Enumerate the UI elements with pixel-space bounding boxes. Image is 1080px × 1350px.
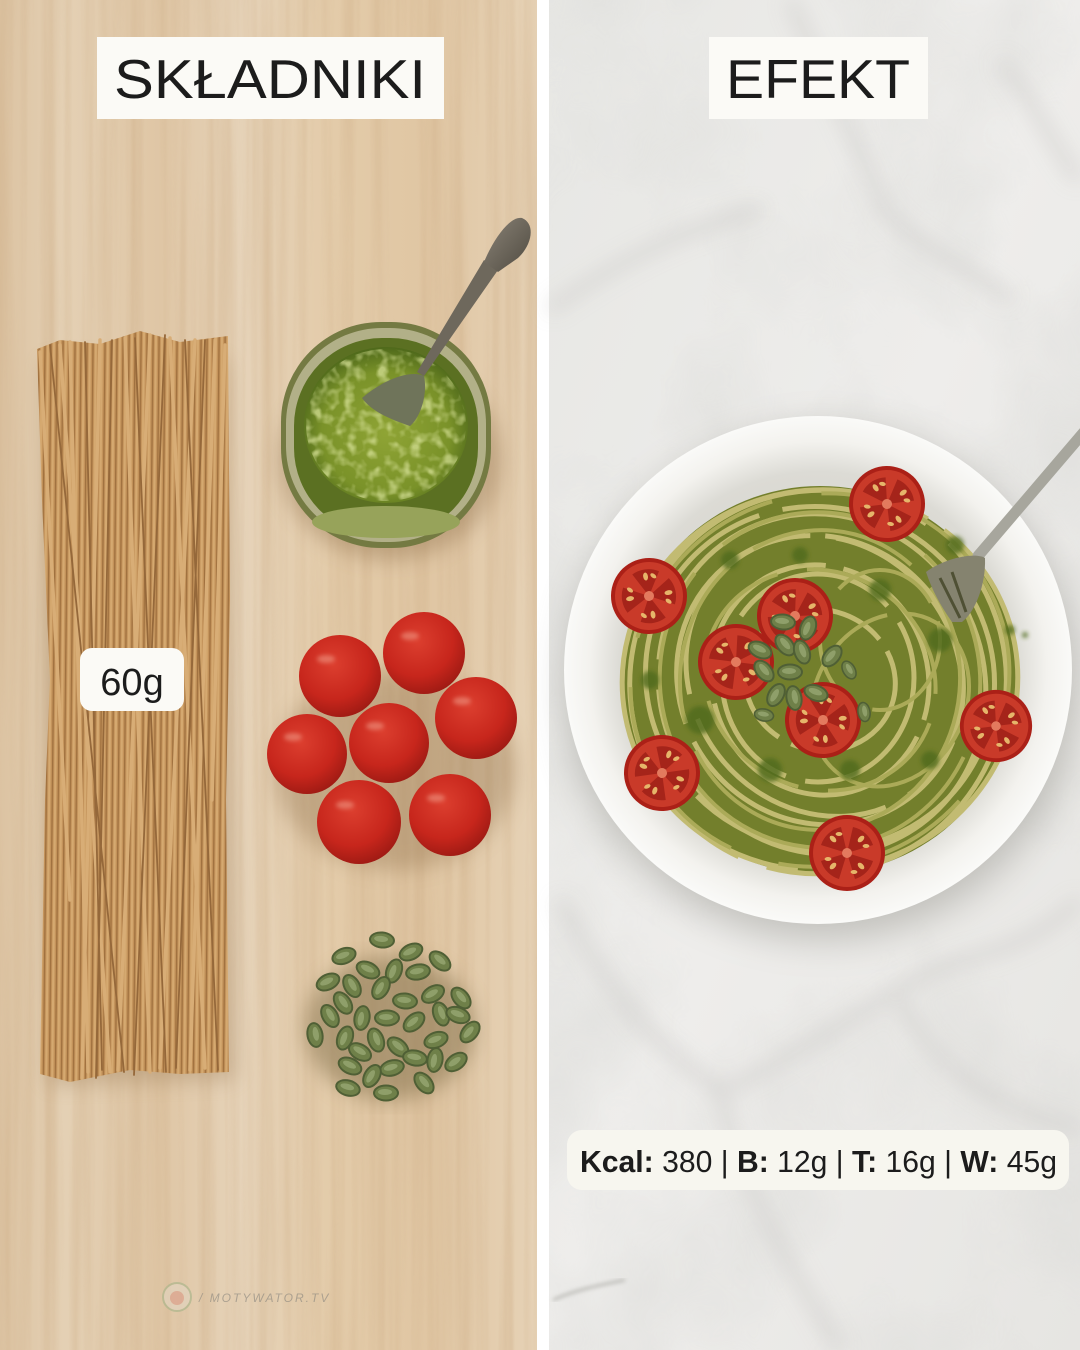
watermark: MOTYWATOR.TV: / MOTYWATOR.TV (198, 1291, 330, 1305)
bowl of pesto pasta (557, 416, 1080, 941)
spoon (362, 218, 531, 426)
fork (926, 432, 1080, 622)
heading: SKŁADNIKI: SKŁADNIKI (114, 48, 426, 110)
watermark: MOTYWATOR.TV (163, 1283, 330, 1311)
label: 60g (80, 648, 184, 711)
nutrition bar (567, 1130, 1069, 1190)
heading: EFEKT (709, 37, 928, 119)
pasta nest (557, 419, 1080, 941)
heading: SKŁADNIKI (97, 37, 444, 119)
cherry tomatoes (267, 612, 517, 870)
spaghetti bundle (37, 331, 235, 1085)
pumpkin seeds (304, 930, 485, 1102)
tomato halves (596, 460, 1038, 891)
label: 60g: 60g (100, 662, 164, 704)
heading: EFEKT: EFEKT (726, 48, 910, 110)
bowl seeds (745, 612, 873, 724)
pesto jar with spoon (280, 218, 531, 560)
panel: ingredients wood background (0, 0, 537, 1350)
nutrition bar: Kcal: 380 | B: 12g | T: 16g | W: 45g (580, 1144, 1057, 1179)
pesto smears (641, 536, 1028, 782)
panel: result marble background (549, 0, 1080, 1350)
